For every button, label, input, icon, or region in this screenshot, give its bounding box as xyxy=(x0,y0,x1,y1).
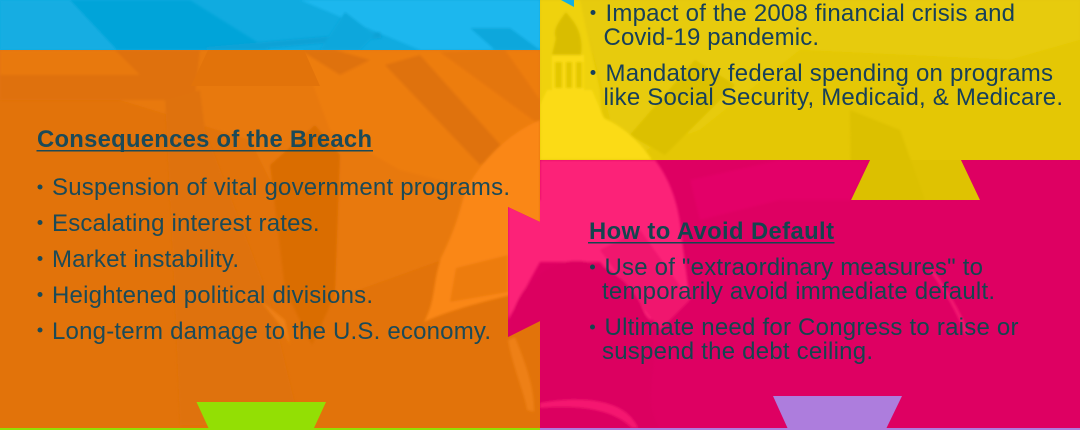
dark head xyxy=(508,261,644,418)
trapezoid: purple tab xyxy=(773,396,902,428)
line: purple bottom edge xyxy=(540,428,1080,430)
small blue triangle xyxy=(561,0,574,7)
hair highlight xyxy=(508,337,534,412)
text block: how to avoid default: suspend the debt ceiling. xyxy=(602,338,873,365)
line: green bottom edge xyxy=(0,428,540,430)
text block: how to avoid default: Use of "extraordinary measures" to xyxy=(604,254,983,281)
text block: causes list: Mandatory federal spending on programs xyxy=(606,60,1053,87)
text block: how to avoid default xyxy=(588,218,1018,365)
text block: consequences of the breach: Suspension of vital government programs. xyxy=(52,174,510,201)
heading: how to avoid default: How to Avoid Default xyxy=(589,218,834,245)
panel: yellow causes xyxy=(540,0,1080,200)
text block: how to avoid default: temporarily avoid immediate default. xyxy=(602,278,995,305)
dark sleeve and hand xyxy=(0,50,200,100)
text block: consequences of the breach: Long-term damage to the U.S. economy. xyxy=(52,318,491,345)
panel: pink how to avoid default xyxy=(508,160,1080,428)
text block: causes list: Covid-19 pandemic. xyxy=(604,24,819,51)
text block: causes list xyxy=(590,0,1063,111)
dome on orange xyxy=(424,120,540,322)
text block: consequences of the breach: Market instability. xyxy=(52,246,239,273)
text block: consequences of the breach xyxy=(36,126,510,345)
heading: consequences: Consequences of the Breach xyxy=(37,126,372,153)
text block: how to avoid default: Ultimate need for Congress to raise or xyxy=(604,314,1018,341)
text block: consequences of the breach: Heightened political divisions. xyxy=(52,282,373,309)
trapezoid: green tab xyxy=(196,402,326,428)
text block: consequences of the breach: Escalating interest rates. xyxy=(52,210,320,237)
dome on yellow xyxy=(540,55,652,160)
panel: blue header xyxy=(0,0,540,50)
panel: orange consequences xyxy=(0,50,540,428)
text block: causes list: Impact of the 2008 financial crisis and xyxy=(606,0,1015,27)
text block: causes list: like Social Security, Medicaid, & Medicare. xyxy=(604,84,1063,111)
